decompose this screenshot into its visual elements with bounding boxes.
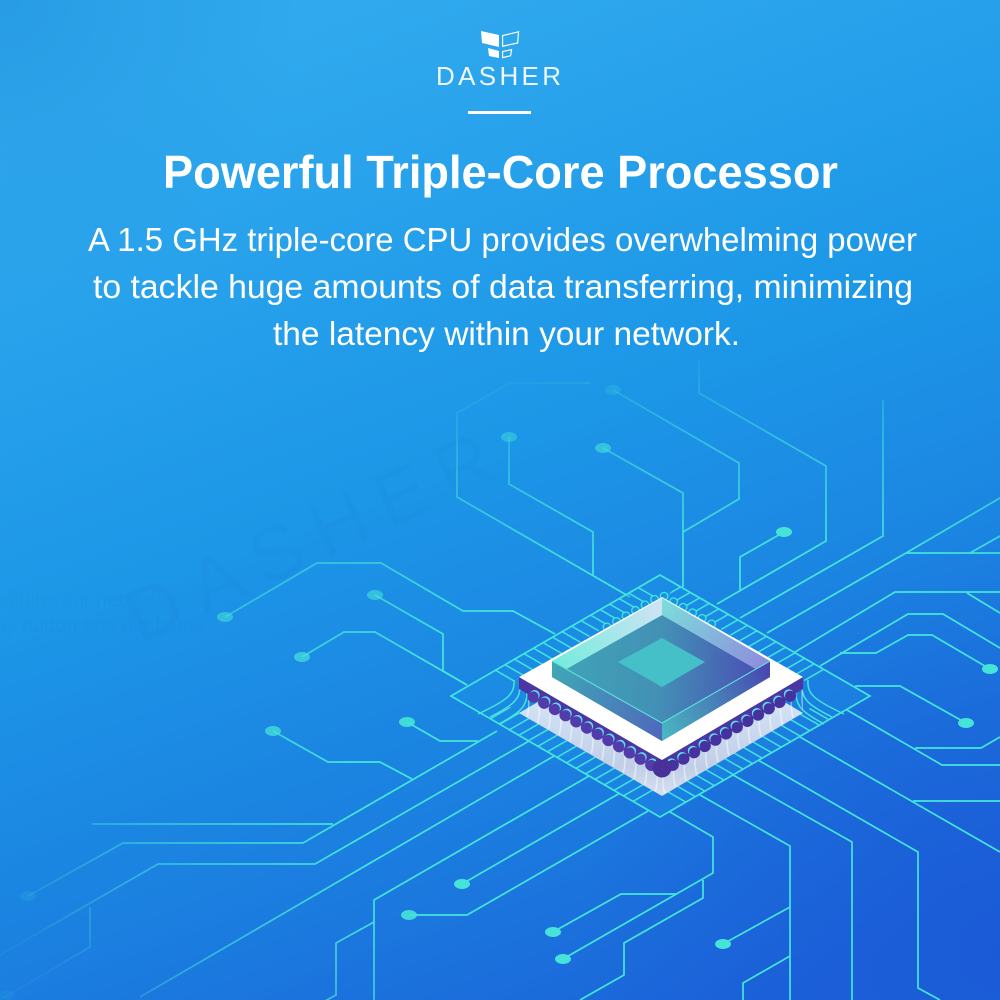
core die (618, 638, 705, 687)
processor chip (451, 575, 870, 817)
translucent block (552, 598, 770, 741)
pin stubs (490, 585, 830, 805)
bottom traces (553, 760, 940, 1000)
description text: to tackle huge amounts of data transferring, minimizing (93, 268, 913, 305)
lower plate (519, 630, 803, 796)
description text: the latency within your network. (273, 315, 740, 352)
top traces (457, 360, 883, 618)
logo mark (481, 31, 519, 58)
logo wordmark: DASHER (436, 61, 561, 91)
divider rule (468, 111, 531, 114)
chip outline diamond (451, 575, 870, 817)
description text (88, 221, 917, 352)
circuit traces (0, 360, 1000, 1000)
lower plate leg arcs (519, 677, 803, 796)
right traces (767, 498, 1000, 852)
white top plate (519, 597, 803, 760)
corner wires (478, 680, 844, 724)
left traces (0, 563, 648, 1000)
trace end dots (0, 385, 998, 1000)
logo (436, 31, 561, 114)
description text: A 1.5 GHz triple-core CPU provides overwhelming power (88, 221, 917, 258)
purple pin band (519, 677, 803, 778)
title: Powerful Triple-Core Processor (163, 146, 838, 198)
